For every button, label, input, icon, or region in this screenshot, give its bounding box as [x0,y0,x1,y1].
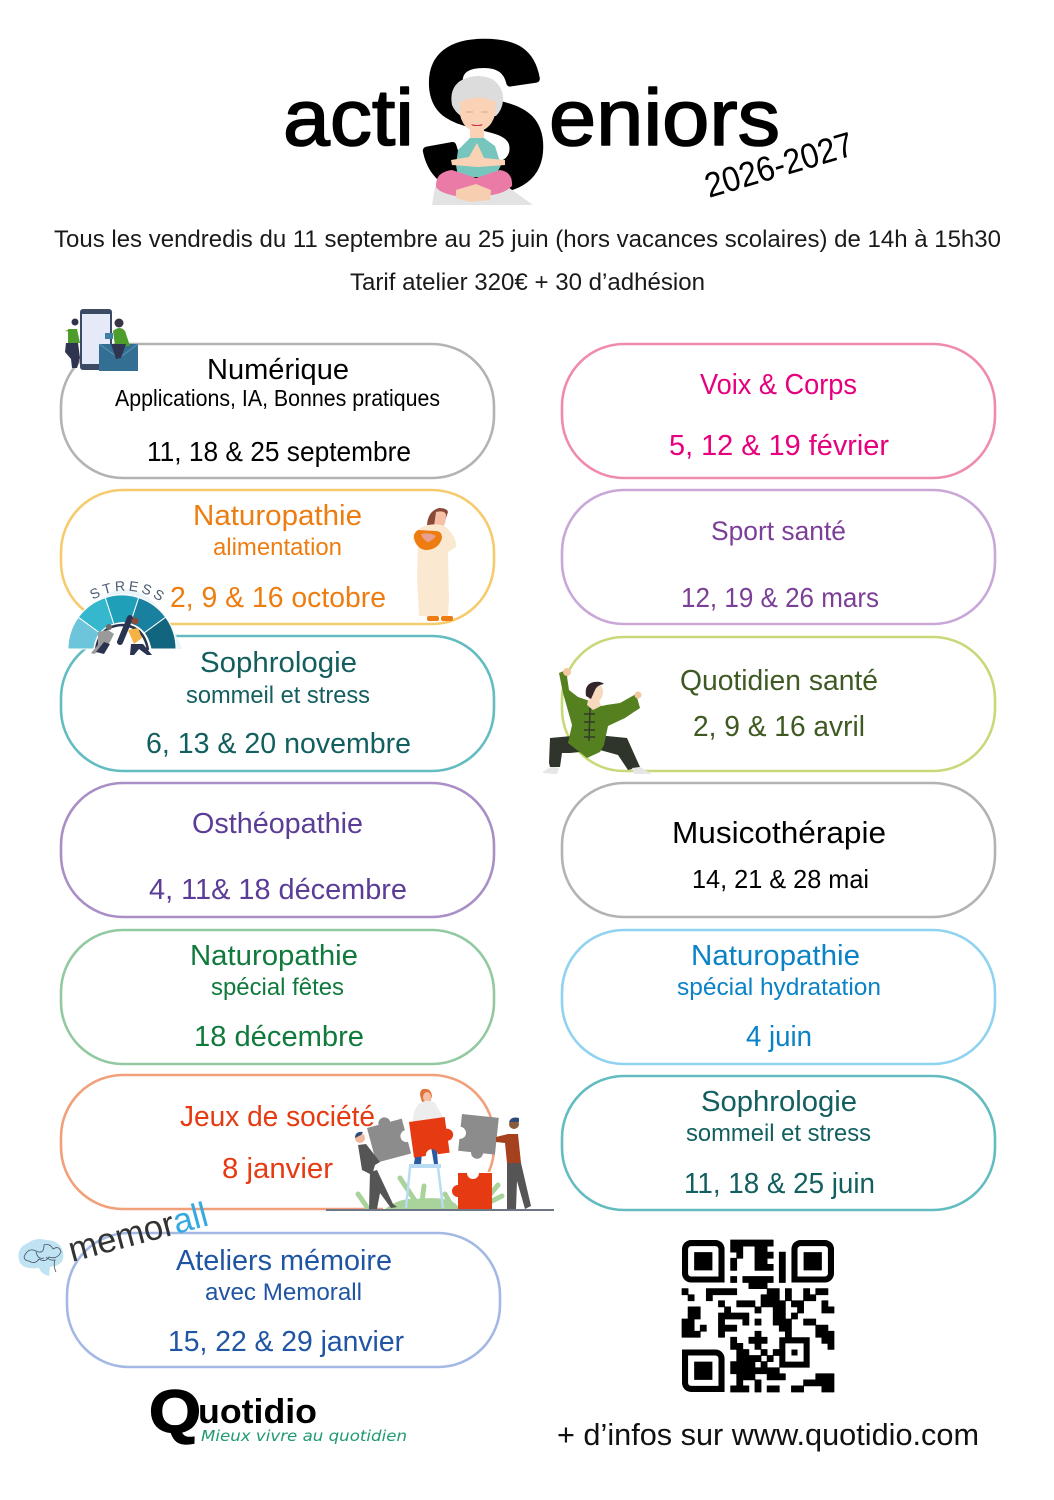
heading: Naturopathie [193,500,362,532]
subheading: sommeil et stress [686,1120,871,1147]
panel: Numérique [61,344,494,478]
subheading: sommeil et stress [186,682,370,709]
dates: 4, 11& 18 décembre [149,874,407,906]
panel: Quotidien santé [562,637,995,771]
dates: 12, 19 & 26 mars [681,582,879,613]
icon: people assembling puzzle [326,1089,554,1211]
dates: 5, 12 & 19 février [669,430,889,462]
panel: Osthéopathie [61,783,494,917]
heading: Voix & Corps [700,369,857,401]
panel: Sophrologie juin [562,1076,995,1210]
icon: senior woman meditating [432,76,533,205]
subheading: spécial fêtes [211,974,344,1001]
letters uotidio: uotidio [198,1393,317,1431]
schedule text: Tous les vendredis du 11 septembre au 25 juin (hors vacances scolaires) de 14h à 15h30 [54,226,1001,253]
subheading: avec Memorall [205,1279,362,1306]
heading: Osthéopathie [192,808,363,840]
panel: Sport santé [562,490,995,624]
heading: Musicothérapie [672,815,886,850]
dates: 14, 21 & 28 mai [692,864,869,894]
logo word: eniors: eniors [549,73,780,162]
dates: 15, 22 & 29 janvier [168,1326,404,1358]
heading: Sport santé [711,516,846,546]
panel: Naturopathie spécial fêtes [61,930,494,1064]
icon: woman cooking [413,508,456,621]
subheading: spécial hydratation [677,974,881,1001]
icon: tai chi man [542,668,652,774]
heading: Sophrologie [200,647,357,679]
dates: 18 décembre [194,1021,364,1053]
panel: Voix & Corps [562,344,995,478]
logo: memorall [18,1195,212,1276]
heading: Numérique: Numérique [207,354,349,386]
panel: Sophrologie novembre [61,636,494,771]
heading: Ateliers mémoire [176,1245,392,1277]
dates: 2, 9 & 16 avril [693,711,865,743]
year: 2026-2027: 2026-2027 [700,125,858,206]
heading: Naturopathie [691,940,860,972]
panel: Musicothérapie [562,783,995,917]
subheading: Applications, IA, Bonnes pratiques [115,385,440,411]
website text: + d’infos sur www.quotidio.com [557,1417,979,1452]
tagline: Mieux vivre au quotidien [201,1427,407,1445]
heading: Jeux de société [180,1101,375,1133]
wordmark: memorall [64,1195,212,1270]
dates: 8 janvier [222,1153,333,1185]
subheading: alimentation [213,534,342,561]
price text: Tarif atelier 320€ + 30 d’adhésion [350,269,705,296]
panel: Ateliers mémoire [67,1233,500,1367]
dates: 6, 13 & 20 novembre [146,728,411,760]
heading: Naturopathie [190,940,358,972]
dates: 11, 18 & 25 juin [684,1168,875,1200]
QR code [682,1240,834,1392]
dates: 2, 9 & 16 octobre [170,582,386,614]
icon: stress gauge [68,581,182,655]
logo: Quotidio [149,1378,407,1445]
dates: 11, 18 & 25 septembre [147,436,411,467]
panel: Jeux de société [61,1075,494,1209]
panel: Naturopathie alimentation [61,490,494,624]
letter Q: Q [149,1378,201,1445]
panel: Naturopathie spécial hydratation [562,930,995,1064]
word: STRESS: STRESS [90,581,164,600]
dates: 4 juin [746,1021,812,1053]
heading: Quotidien santé [680,665,878,697]
logo word: acti: acti [283,73,414,162]
heading: Sophrologie [701,1086,857,1118]
icon: brain [18,1239,63,1276]
logo large S: S [421,1,547,233]
logo: actiSeniors [283,1,780,233]
icon: people with phone [65,309,138,371]
